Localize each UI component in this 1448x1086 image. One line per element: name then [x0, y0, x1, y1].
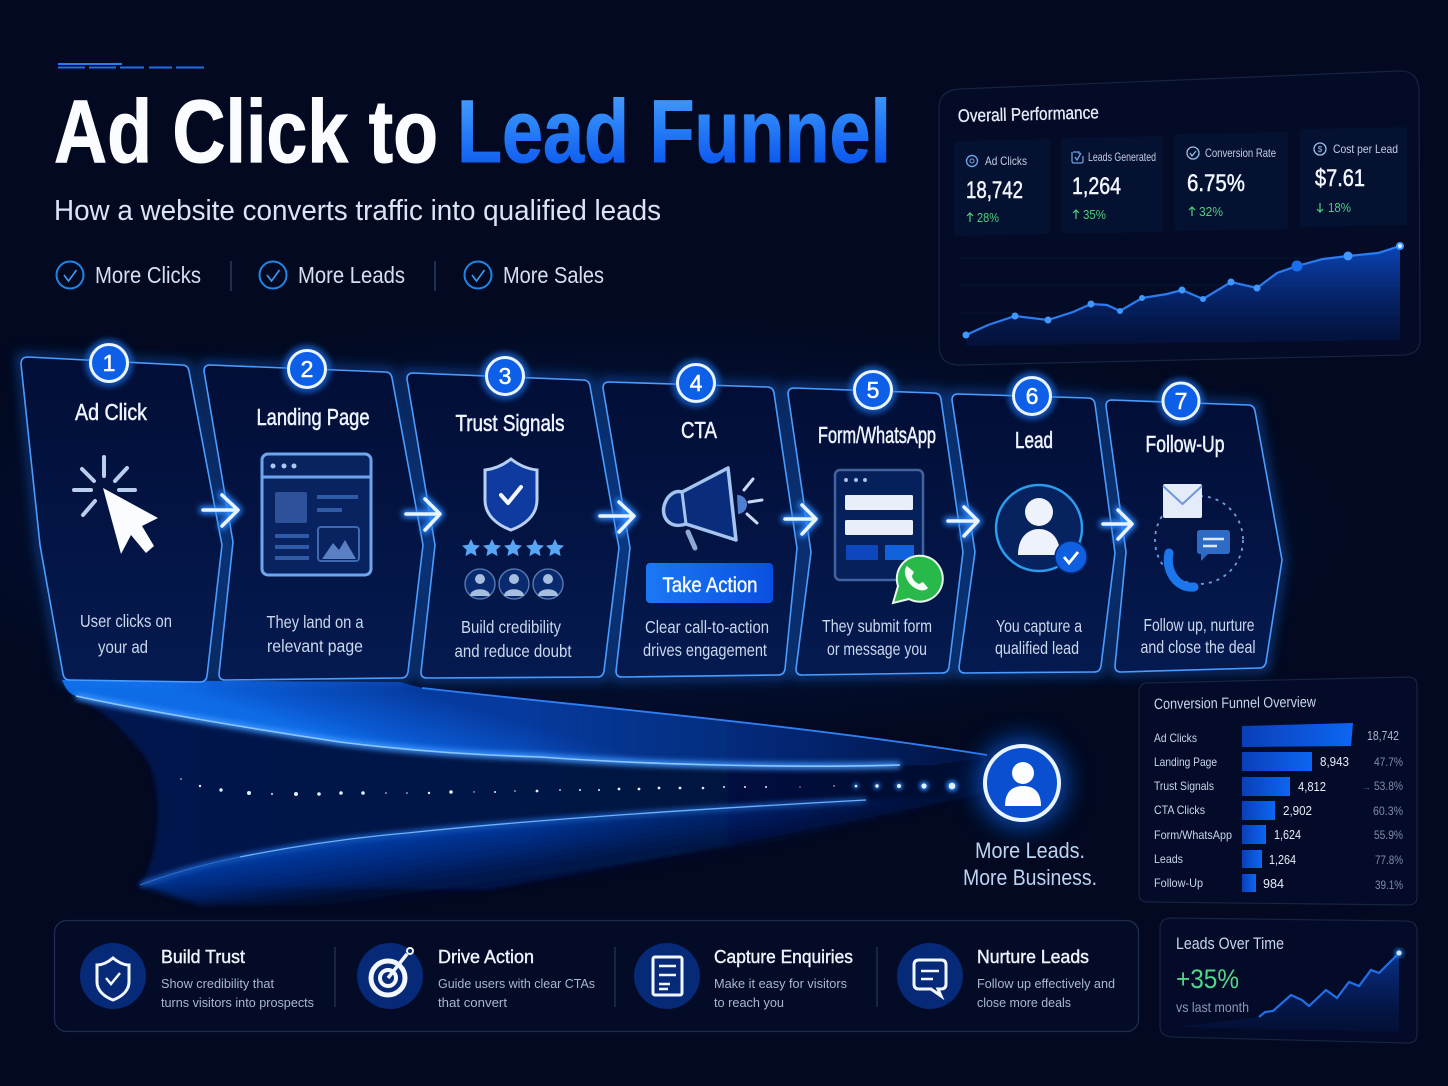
lower band — [140, 792, 985, 905]
button: take action — [646, 563, 773, 603]
panel: step 2 landing page: relevant page — [267, 636, 363, 656]
funnel labels and values: Leads — [1154, 852, 1183, 866]
benefit: build trust — [80, 943, 314, 1010]
stat: leads generated: 1,264 — [1072, 173, 1121, 200]
funnel labels and values: → — [1362, 782, 1371, 792]
icon: lead person — [976, 737, 1068, 829]
step description: User clicks on — [80, 611, 172, 631]
funnel labels and values — [1154, 729, 1403, 892]
stat: ad clicks: 28% — [977, 211, 999, 225]
benefit: nurture leads: Nurture Leads — [977, 947, 1089, 967]
stat: cost per lead: 18% — [1328, 201, 1351, 215]
panel: step 4 cta — [603, 359, 797, 677]
benefit: drive action — [357, 943, 595, 1010]
check: more sales — [464, 262, 604, 288]
check: more leads: More Leads — [298, 262, 405, 288]
funnel labels and values: 77.8% — [1375, 853, 1403, 867]
panel heading: Overall Performance — [958, 102, 1099, 126]
step number 3 — [481, 352, 529, 400]
line chart: performance — [960, 242, 1404, 346]
benefit: drive action: Guide users with clear CTAs — [438, 976, 595, 991]
step number 2: 2 — [301, 356, 313, 382]
step number 4 — [672, 359, 720, 407]
step title: Trust Signals — [456, 410, 564, 436]
funnel labels and values: 8,943 — [1320, 755, 1349, 769]
benefit: capture enquiries: to reach you — [714, 995, 784, 1010]
outcome: more leads more business: More Business. — [963, 865, 1097, 890]
benefit: build trust: Build Trust — [161, 947, 245, 967]
stat: cost per lead — [1300, 127, 1407, 227]
arrows between steps — [203, 495, 1132, 539]
panel: step 2 landing page — [204, 345, 423, 680]
panel: step 5 form whatsapp — [788, 366, 963, 675]
stat: cost per lead: $7.61 — [1315, 165, 1365, 192]
outcome: more leads more business — [963, 737, 1097, 890]
funnel labels and values: 55.9% — [1374, 828, 1403, 842]
icon: browser window — [262, 454, 371, 575]
funnel labels and values: 2,902 — [1283, 804, 1312, 818]
step title: Ad Click — [75, 399, 147, 425]
stat: conversion rate: 32% — [1199, 205, 1223, 219]
panel: step 5 form whatsapp: or message you — [827, 639, 927, 659]
stat: ad clicks: Ad Clicks — [985, 154, 1027, 168]
benefit: capture enquiries — [634, 943, 853, 1010]
funnel labels and values: CTA Clicks — [1154, 803, 1205, 817]
dotted progress path — [180, 778, 957, 796]
icon: email chat phone — [1155, 484, 1243, 587]
funnel labels and values: Ad Clicks — [1154, 731, 1197, 745]
panel: leads over time — [1160, 918, 1417, 1043]
step number 3: 3 — [499, 363, 511, 389]
icon: megaphone — [664, 468, 762, 548]
icon: click cursor — [74, 457, 158, 554]
funnel labels and values: 60.3% — [1373, 804, 1403, 818]
metric: plus 35 percent: +35% — [1176, 964, 1239, 994]
stat: ad clicks — [954, 139, 1050, 236]
benefit: capture enquiries: Capture Enquiries — [714, 947, 853, 967]
step description: You capture a — [996, 616, 1082, 636]
funnel body — [62, 678, 987, 890]
panel: step 1 ad click: your ad — [98, 637, 148, 657]
stat: conversion rate: Conversion Rate — [1205, 146, 1276, 160]
step number 5: 5 — [867, 377, 879, 403]
benefit: drive action: Drive Action — [438, 947, 534, 967]
title: Ad Click to — [54, 81, 438, 181]
benefit: nurture leads — [897, 943, 1115, 1010]
funnel bars — [1242, 723, 1353, 892]
funnel labels and values: Landing Page — [1154, 755, 1217, 769]
upper band — [62, 680, 987, 766]
funnel labels and values: Form/WhatsApp — [1154, 828, 1232, 842]
step number 5 — [849, 366, 897, 414]
check: more clicks — [56, 262, 201, 288]
funnel labels and values: 984 — [1263, 877, 1284, 891]
subtitle: How a website converts traffic into qualified leads — [54, 195, 661, 227]
step number 1 — [85, 339, 133, 387]
panel heading: Leads Over Time — [1176, 935, 1284, 953]
step title: Form/WhatsApp — [818, 422, 936, 448]
step number 1: 1 — [103, 350, 115, 376]
check: more leads — [260, 262, 405, 288]
step description: Follow up, nurture — [1144, 615, 1254, 635]
benefit: build trust: Show credibility that — [161, 976, 274, 991]
outcome text: More Leads. — [975, 838, 1085, 863]
line chart: leads — [1176, 949, 1403, 1032]
stat: cost per lead: $ — [1318, 145, 1323, 154]
step title: Lead — [1015, 427, 1053, 453]
button: take action: Take Action — [662, 574, 758, 597]
card glows — [21, 357, 1282, 682]
step number 2 — [283, 345, 331, 393]
funnel labels and values: Trust Signals — [1154, 779, 1214, 793]
stat: conversion rate: 6.75% — [1187, 170, 1245, 197]
funnel labels and values: 18,742 — [1367, 729, 1399, 743]
step description: They submit form — [822, 616, 932, 636]
step number 7 — [1158, 378, 1204, 424]
funnel labels and values: 39.1% — [1375, 878, 1403, 892]
step title: CTA — [681, 417, 718, 443]
panel: overall performance — [939, 71, 1420, 365]
panel: step 7 follow-up — [1106, 378, 1282, 672]
step description: Build credibility — [461, 617, 561, 637]
funnel flow graphic — [62, 678, 987, 905]
panel: benefits bar — [54, 920, 1138, 1032]
icon: shield with stars and avatars — [462, 459, 564, 599]
benefit: nurture leads: Follow up effectively and — [977, 976, 1115, 991]
stat: leads generated: Leads Generated — [1088, 150, 1156, 164]
funnel labels and values: 4,812 — [1298, 780, 1326, 794]
panel: step 7 follow-up: and close the deal — [1140, 637, 1256, 657]
stat: ad clicks: 18,742 — [966, 177, 1023, 204]
step description: They land on a — [266, 612, 364, 632]
step title: Landing Page — [256, 404, 370, 430]
stat: leads generated: 35% — [1083, 208, 1106, 222]
stat: conversion rate — [1174, 132, 1288, 231]
metric caption: vs last month — [1176, 999, 1249, 1015]
funnel labels and values: 1,264 — [1269, 853, 1296, 867]
step number 6 — [1008, 372, 1056, 420]
panel heading: Conversion Funnel Overview — [1154, 694, 1316, 713]
panel: step 6 lead — [952, 372, 1115, 673]
benefit: capture enquiries: Make it easy for visitors — [714, 976, 847, 991]
panel: step 6 lead: qualified lead — [995, 638, 1079, 658]
icon: form with whatsapp — [835, 470, 943, 603]
icon: qualified lead person — [996, 485, 1087, 573]
funnel labels and values: 47.7% — [1374, 755, 1403, 769]
step number 4: 4 — [690, 370, 703, 396]
panel: step 3 trust signals: and reduce doubt — [454, 641, 572, 661]
funnel labels and values: 1,624 — [1274, 828, 1301, 842]
panel: step 1 ad click — [21, 339, 222, 682]
title: Lead Funnel — [457, 81, 891, 181]
panel: step 3 trust signals — [407, 352, 619, 678]
benefit: nurture leads: close more deals — [977, 995, 1071, 1010]
header accent lines — [58, 64, 204, 68]
funnel labels and values: 53.8% — [1374, 779, 1403, 793]
benefit: build trust: turns visitors into prospects — [161, 995, 314, 1010]
panel: step 4 cta: drives engagement — [643, 640, 767, 660]
benefit: drive action: that convert — [438, 995, 507, 1010]
step number 6: 6 — [1026, 383, 1038, 409]
stat: cost per lead: Cost per Lead — [1333, 142, 1398, 156]
benefit checks row — [56, 261, 604, 291]
panel: conversion funnel overview — [1139, 677, 1417, 905]
funnel labels and values: Follow-Up — [1154, 876, 1203, 890]
check: more clicks: More Clicks — [95, 262, 201, 288]
stat: leads generated — [1061, 136, 1163, 234]
step number 7: 7 — [1175, 388, 1187, 414]
step description: Clear call-to-action — [645, 617, 769, 637]
step title: Follow-Up — [1146, 431, 1224, 457]
check: more sales: More Sales — [503, 262, 604, 288]
